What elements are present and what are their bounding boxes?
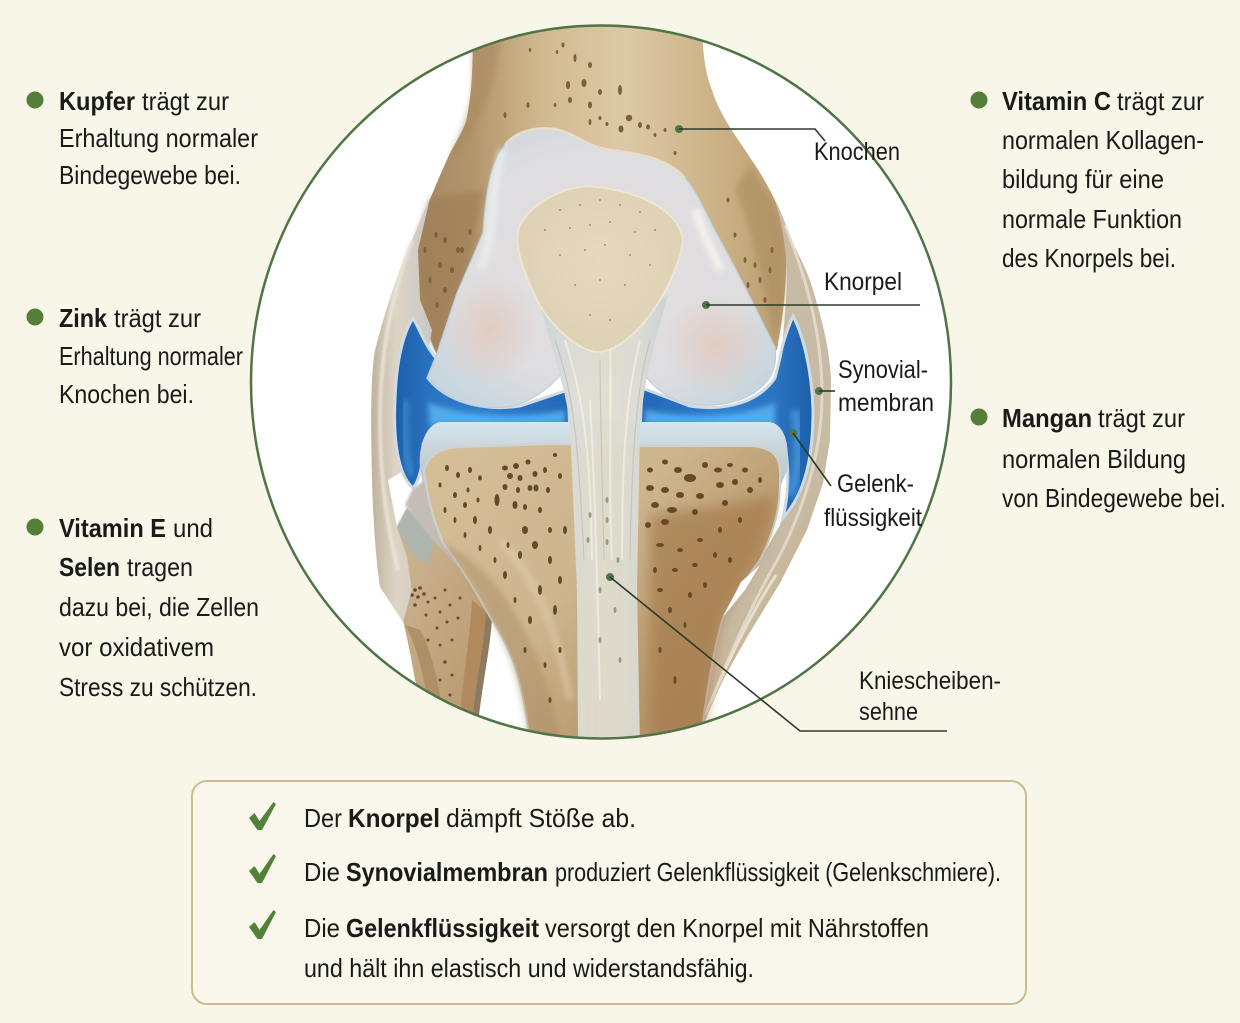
line: Synovialmembran: produziert Gelenkflüssigkeit (Gelenkschmiere). xyxy=(555,857,1001,887)
text block: Vitamin E und Selen: dazu bei, die Zellen xyxy=(59,592,259,622)
line: Knorpel: Knorpel xyxy=(348,803,440,833)
line: Synovialmembran: Synovialmembran xyxy=(346,857,548,887)
line: Gelenkflüssigkeit: Gelenkflüssigkeit xyxy=(346,913,539,943)
label: Gelenkflüssigkeit xyxy=(824,470,922,532)
patella xyxy=(518,186,682,352)
cartilage xyxy=(428,128,776,408)
line: Gelenkflüssigkeit: und hält ihn elastisch und widerstandsfähig. xyxy=(304,953,754,983)
line: Gelenkflüssigkeit: Die xyxy=(304,913,340,943)
label: Synovialmembran: membran xyxy=(838,389,934,417)
text block: Zink: Zink xyxy=(59,303,107,333)
fibula xyxy=(380,508,492,715)
text block: Zink: trägt zur xyxy=(114,303,201,333)
text block: Kupfer xyxy=(26,86,258,190)
leader line: Knorpel xyxy=(702,301,920,309)
white gap between tibia and ligament xyxy=(723,565,760,617)
text block: Mangan: normalen Bildung xyxy=(1002,444,1186,474)
label: Gelenkflüssigkeit: flüssigkeit xyxy=(824,504,922,532)
line: Knorpel: dämpft Stöße ab. xyxy=(446,803,636,833)
label: Gelenkflüssigkeit: Gelenk- xyxy=(837,470,914,498)
text block: Vitamin C xyxy=(970,86,1204,273)
label: Kniescheibensehne: sehne xyxy=(859,698,918,726)
text block: Vitamin C: des Knorpels bei. xyxy=(1002,243,1176,273)
text block: Vitamin E und Selen: und xyxy=(173,513,213,543)
text block: Vitamin C: trägt zur xyxy=(1117,86,1204,116)
label: Synovialmembran: Synovial- xyxy=(838,356,928,384)
text block: Vitamin E und Selen: Vitamin E xyxy=(59,513,166,543)
panel: summary box xyxy=(192,781,1026,1004)
circle outline xyxy=(251,26,951,738)
tibia pores xyxy=(438,453,762,703)
femur bone xyxy=(416,15,786,355)
text block: Vitamin C: Vitamin C xyxy=(1002,86,1111,116)
text block: Zink xyxy=(26,303,243,409)
text block: Zink: Erhaltung normaler xyxy=(59,341,243,371)
text block: Kupfer: Kupfer xyxy=(59,86,135,116)
icon: check 1 xyxy=(249,802,276,830)
line: Knorpel: Der xyxy=(304,803,342,833)
icon: check 2 xyxy=(249,854,276,883)
text block: Vitamin E und Selen: Stress zu schützen. xyxy=(59,672,257,702)
label: Knochen: Knochen xyxy=(814,138,900,166)
leader line: Synovialmembran xyxy=(815,387,835,395)
leader line: Kniescheibensehne xyxy=(606,573,947,731)
text block: Mangan: trägt zur xyxy=(1098,403,1185,433)
text block: Kupfer: trägt zur xyxy=(142,86,229,116)
line: Gelenkflüssigkeit: versorgt den Knorpel mit Nährstoffen xyxy=(545,913,929,943)
line: Gelenkflüssigkeit xyxy=(304,913,929,983)
label: Kniescheibensehne: Kniescheiben- xyxy=(859,667,1001,695)
meniscus and tibia xyxy=(405,422,788,745)
label: Synovialmembran xyxy=(838,356,934,417)
text block: Kupfer: Erhaltung normaler xyxy=(59,123,258,153)
line: Knorpel xyxy=(304,803,636,833)
text block: Mangan: Mangan xyxy=(1002,403,1092,433)
knee anatomy circle xyxy=(251,15,951,745)
text block: Vitamin E und Selen: tragen xyxy=(127,552,193,582)
synovial fluid blue xyxy=(395,316,813,518)
text block: Vitamin C: bildung für eine xyxy=(1002,164,1164,194)
icon: check 3 xyxy=(249,910,276,939)
text block: Vitamin E und Selen: vor oxidativem xyxy=(59,632,214,662)
text block: Vitamin C: normalen Kollagen- xyxy=(1002,125,1204,155)
leader line: Knochen xyxy=(675,125,825,141)
text block: Vitamin E und Selen xyxy=(26,513,259,702)
patellar tendon xyxy=(540,295,668,745)
text block: Vitamin C: normale Funktion xyxy=(1002,204,1182,234)
femur pores xyxy=(424,42,774,323)
text block: Mangan xyxy=(970,403,1226,513)
text block: Vitamin E und Selen: Selen xyxy=(59,552,120,582)
ligaments left and right xyxy=(371,180,831,745)
label: Kniescheibensehne xyxy=(859,667,1001,726)
line: Synovialmembran: Die xyxy=(304,857,340,887)
line: Synovialmembran xyxy=(304,857,1001,887)
leader line: Gelenkflüssigkeit xyxy=(789,429,831,486)
label: Knorpel: Knorpel xyxy=(824,268,902,296)
text block: Kupfer: Bindegewebe bei. xyxy=(59,160,241,190)
text block: Zink: Knochen bei. xyxy=(59,379,194,409)
